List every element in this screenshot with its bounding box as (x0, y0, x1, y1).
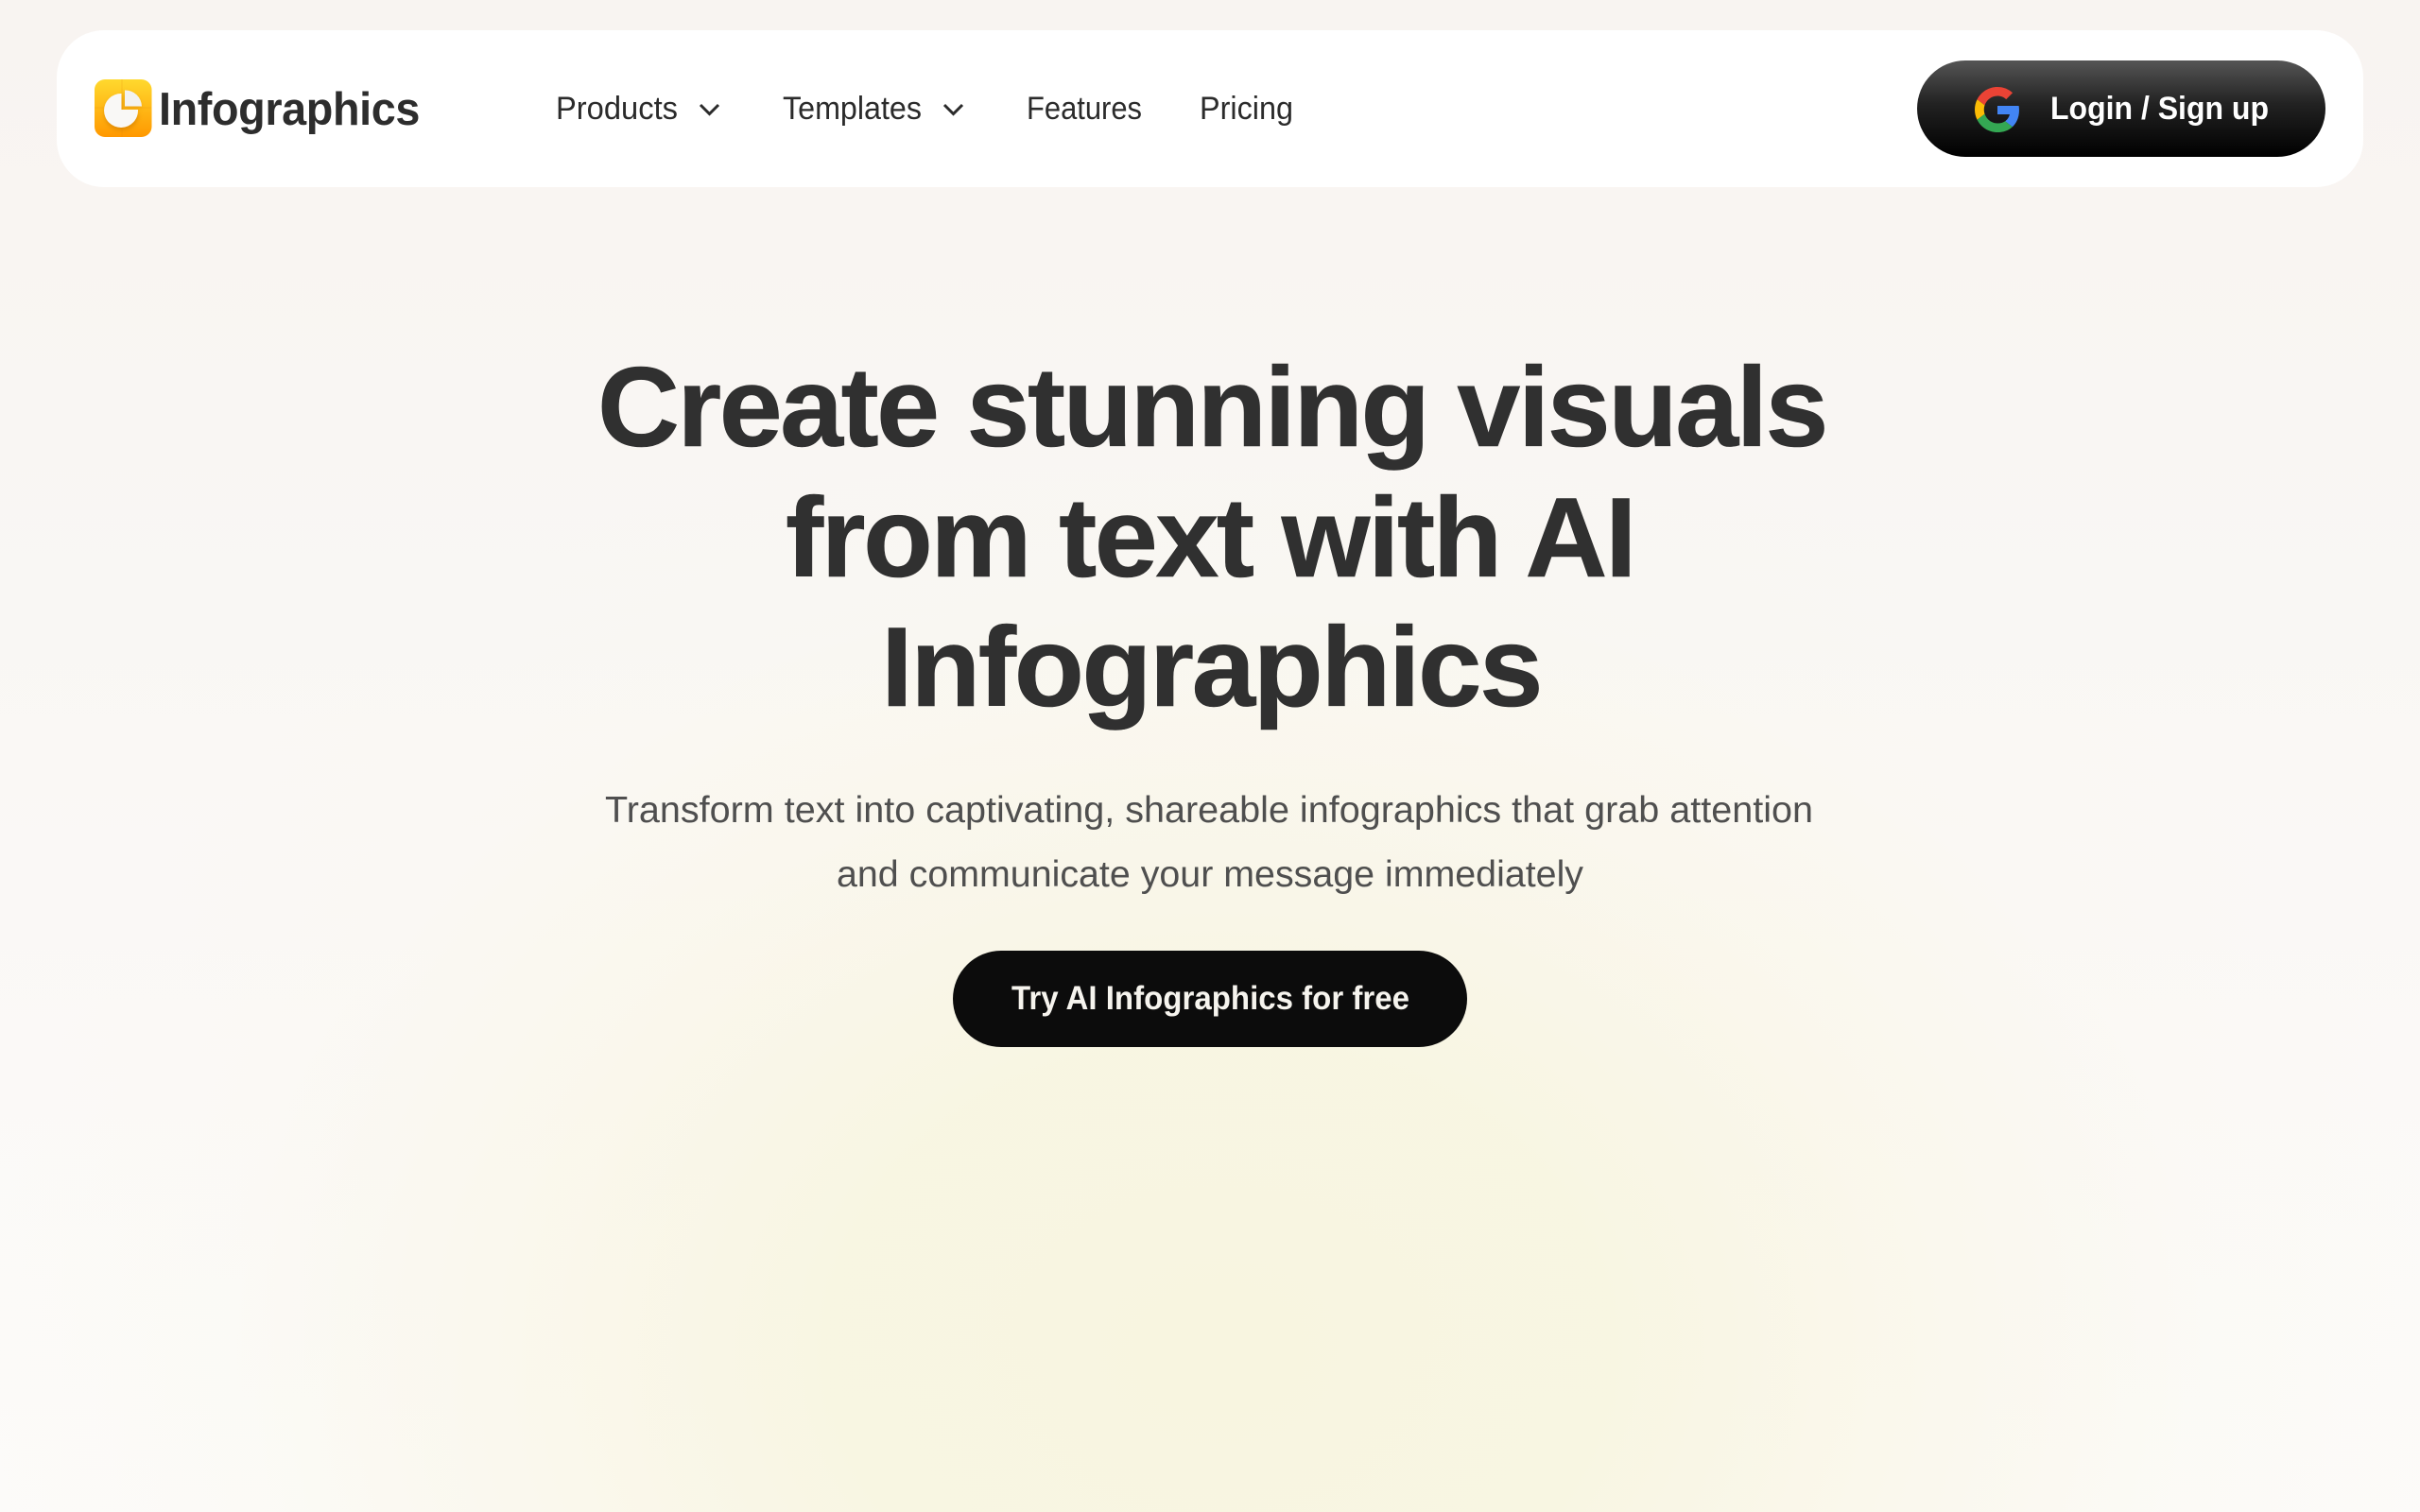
call to action button (953, 951, 1467, 1047)
navigation bar (57, 30, 2363, 187)
nav item: Templates: Templates (783, 91, 922, 127)
hero subtitle: and communicate your message immediately (837, 854, 1584, 895)
login label: Login / Sign up (2050, 91, 2269, 127)
hero heading: from text with AI (786, 474, 1634, 601)
nav item: Products: Products (556, 91, 678, 127)
icon: Google G (1975, 87, 2019, 132)
call to action button: Try AI Infographics for free (1011, 980, 1409, 1017)
nav item: Pricing: Pricing (1200, 91, 1293, 127)
hero heading: Infographics (881, 604, 1541, 730)
hero heading: Create stunning visuals (597, 344, 1826, 471)
logo icon (95, 79, 151, 137)
hero subtitle: Transform text into captivating, shareable infographics that grab attention (605, 790, 1813, 831)
hero heading (597, 344, 1826, 730)
nav item: Features: Features (1027, 91, 1142, 127)
hero subtitle (605, 790, 1813, 895)
logo wordmark: Infographics (159, 84, 420, 135)
login button (1917, 60, 2325, 157)
